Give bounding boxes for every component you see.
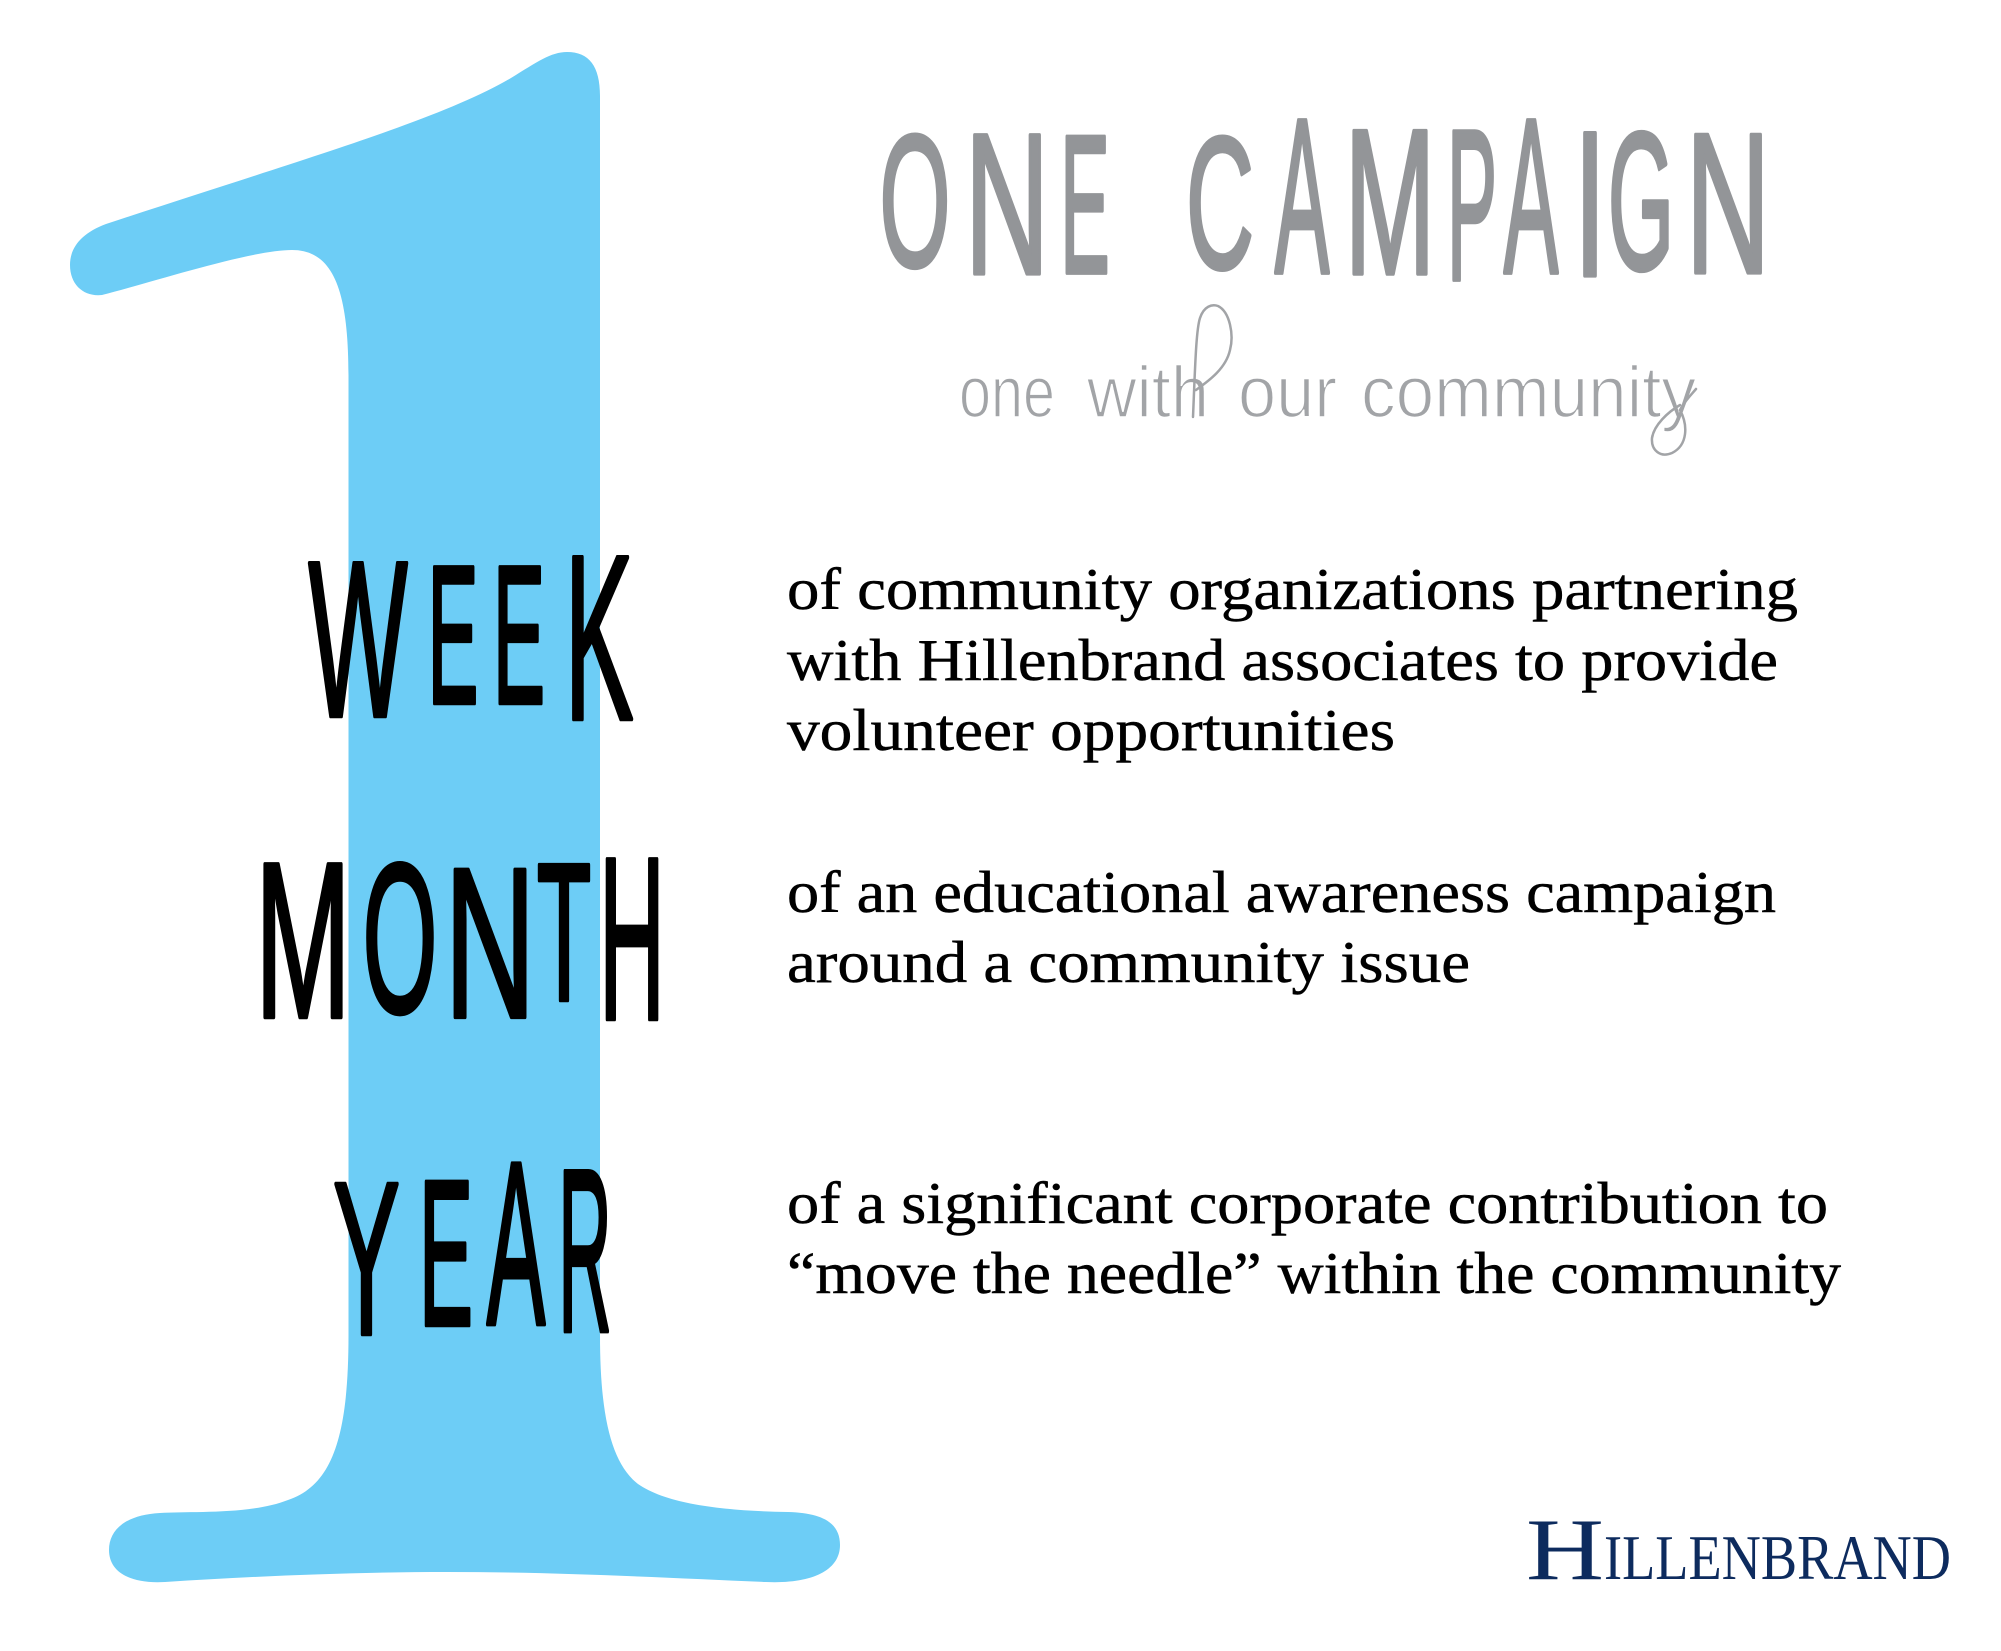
label: MONTH: M: [255, 817, 351, 1065]
label: WEEK: E: [428, 525, 478, 745]
label: MONTH: H: [599, 810, 665, 1069]
title: ONE CAMPAIGN: N: [1686, 92, 1770, 315]
text block: month description: around a community issue: [787, 929, 1470, 995]
title: ONE CAMPAIGN: A: [1504, 74, 1558, 320]
label: MONTH: T: [537, 824, 591, 1042]
subtitle: one with our community: community: [1361, 353, 1696, 433]
subtitle: one with our community: one: [959, 353, 1055, 433]
title: ONE CAMPAIGN: E: [1060, 94, 1110, 315]
subtitle: one with our community: [959, 305, 1696, 455]
label: WEEK: E: [493, 524, 545, 745]
subtitle: one with our community: our: [1238, 353, 1337, 433]
text block: year description: “move the needle” within the community: [787, 1240, 1842, 1306]
logo: Hillenbrand wordmark: H: [1526, 1502, 1604, 1599]
text block: year description: of a significant corporate contribution to: [787, 1170, 1828, 1236]
label: MONTH: O: [363, 820, 437, 1058]
subtitle: one with our community: with: [1086, 353, 1209, 433]
text block: week description: with Hillenbrand associates to provide: [787, 627, 1778, 693]
logo: Hillenbrand wordmark: [1526, 1502, 1951, 1599]
label: WEEK: W: [308, 515, 408, 763]
title: ONE CAMPAIGN: G: [1608, 93, 1674, 312]
label: YEAR: E: [419, 1138, 473, 1370]
text block: year description: [787, 1170, 1842, 1306]
label: MONTH: N: [445, 824, 535, 1063]
text block: week description: of community organizations partnering: [787, 556, 1798, 622]
text block: week description: [787, 556, 1798, 763]
label: WEEK: K: [565, 508, 633, 770]
title: ONE CAMPAIGN: I: [1573, 88, 1607, 320]
title: ONE CAMPAIGN: M: [1345, 87, 1435, 319]
label: YEAR: R: [558, 1122, 612, 1381]
title: ONE CAMPAIGN: A: [1275, 74, 1329, 320]
label: YEAR: A: [487, 1115, 546, 1374]
title: ONE CAMPAIGN: P: [1447, 86, 1497, 326]
logo: Hillenbrand wordmark: ILLENBRAND: [1604, 1522, 1951, 1593]
title: ONE CAMPAIGN: N: [965, 91, 1049, 316]
text block: month description: [787, 859, 1776, 995]
text block: month description: of an educational awareness campaign: [787, 859, 1776, 925]
title: ONE CAMPAIGN: C: [1186, 99, 1254, 308]
title: ONE CAMPAIGN: [880, 74, 1770, 326]
title: ONE CAMPAIGN: O: [880, 97, 950, 307]
label: WEEK: [308, 508, 633, 770]
big blue numeral one: [70, 52, 840, 1582]
text block: week description: volunteer opportunities: [787, 697, 1395, 763]
label: YEAR: Y: [333, 1136, 400, 1380]
label: MONTH: [255, 810, 665, 1069]
label: YEAR: [333, 1115, 612, 1381]
